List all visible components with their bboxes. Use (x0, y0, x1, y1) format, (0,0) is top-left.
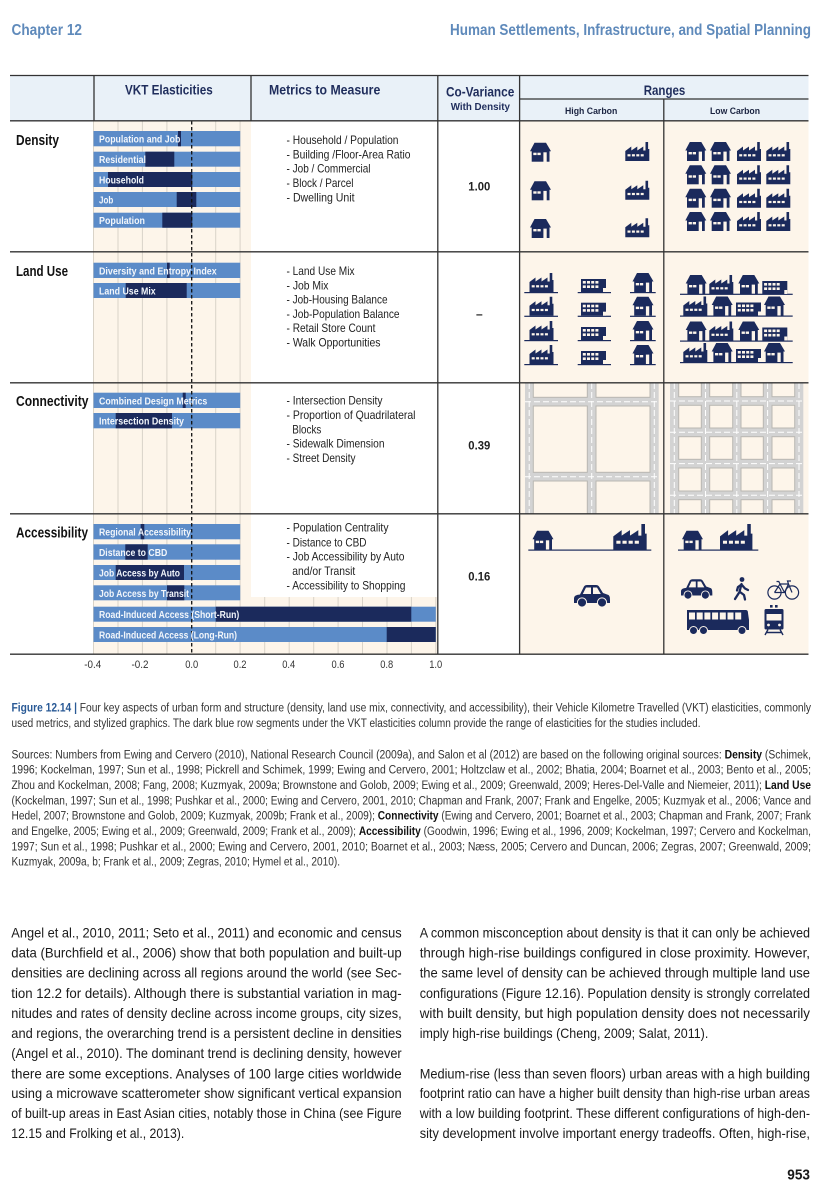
icons: accessibility low carbon (678, 524, 799, 635)
metrics: land use: - Land Use Mix (286, 264, 354, 278)
icon: tram (764, 605, 784, 635)
axis labels: 0.4 (282, 659, 295, 671)
metrics: land use: - Walk Opportunities (286, 336, 380, 350)
co-variance values: 0.16 (468, 570, 491, 584)
metrics: connectivity: - Proportion of Quadrilateral (286, 408, 416, 422)
bar labels: Population (99, 215, 145, 227)
figure caption (12, 703, 811, 730)
icons: accessibility high carbon (528, 524, 651, 607)
metrics: accessibility: - Job Accessibility by Auto (286, 549, 405, 563)
bar labels: Diversity and Entropy Index (99, 265, 217, 277)
metrics: connectivity: - Street Density (286, 451, 356, 465)
icons: density high carbon (530, 142, 649, 238)
bar chart: VKT elasticities (84, 121, 442, 671)
axis labels: 0.6 (332, 659, 344, 671)
sources note: Sources: Numbers from Ewing and Cervero (2010), National Research Council (2009a), and Salon et al (2012) are based on the following original sources: Density (Schimek, (12, 749, 811, 761)
metrics: density: - Block / Parcel (286, 176, 354, 190)
bar labels: Regional Accessibility (99, 527, 191, 539)
metrics: connectivity (286, 394, 416, 465)
icon: bus (687, 610, 749, 634)
body text: left column: and regions, the overarching trend is a persistent decline in densities (11, 1025, 402, 1041)
body text: left column (11, 925, 402, 1141)
icons: land use low carbon (680, 275, 793, 363)
axis labels (84, 659, 442, 671)
column headings: VKT Elasticities (125, 82, 213, 98)
chapter label: Chapter 12 (12, 22, 82, 39)
bar labels: Job Access by Auto (99, 568, 180, 580)
row headings: Land Use (16, 264, 68, 280)
icon: car (681, 579, 712, 599)
co-variance values (468, 179, 491, 584)
axis labels: 0.8 (380, 659, 393, 671)
street grid: connectivity high carbon (525, 383, 659, 514)
icons: land use high carbon (524, 273, 656, 365)
metrics: accessibility: - Accessibility to Shopping (286, 578, 406, 592)
body text: left column: there are some exceptions. Analyses of 100 large cities worldwide (11, 1065, 402, 1081)
figure table (10, 76, 808, 671)
metrics: land use (286, 264, 400, 350)
axis labels: -0.4 (84, 659, 101, 671)
metrics: land use: - Job-Housing Balance (286, 292, 388, 306)
icon: bicycle (768, 581, 799, 599)
body text: left column: tion 12.2 for details). Although there is substantial variation in mag- (11, 985, 402, 1001)
bar labels: Road-Induced Access (Long-Run) (99, 630, 237, 642)
icon: pedestrian (735, 577, 748, 600)
bar labels: Job (99, 194, 113, 206)
metrics: accessibility: - Population Centrality (286, 521, 388, 535)
body text: right column: through high-rise buildings configured in close proximity. However, (420, 945, 810, 961)
column headings: Low Carbon (710, 106, 760, 117)
metrics: density: - Building /Floor-Area Ratio (286, 148, 411, 162)
column headings (125, 82, 760, 117)
column headings: Metrics to Measure (269, 82, 380, 98)
metrics: accessibility: - Distance to CBD (286, 535, 367, 549)
body text: left column: (Angel et al., 2010). The dominant trend is declining density, however (11, 1045, 402, 1061)
bars: connectivity (94, 393, 240, 428)
metrics: accessibility (286, 521, 406, 592)
metrics: density: - Job / Commercial (286, 162, 370, 176)
metrics: land use: - Job-Population Balance (286, 307, 400, 321)
table header background (10, 76, 808, 121)
bar labels: Residential (99, 154, 146, 166)
bar labels (99, 134, 239, 641)
bar labels: Population and Job (99, 134, 180, 146)
column headings: Co-Variance (446, 84, 514, 100)
bar labels: Household (99, 174, 144, 186)
metrics: land use: - Job Mix (286, 278, 328, 292)
body text: left column: data (Burchfield et al., 2006) show that both population and built-up (11, 945, 402, 961)
column headings: With Density (451, 101, 510, 113)
metrics: density (286, 133, 411, 204)
metrics: density: - Household / Population (286, 133, 398, 147)
metrics: accessibility: and/or Transit (292, 564, 356, 578)
metrics: land use: - Retail Store Count (286, 321, 376, 335)
zero line (191, 121, 193, 654)
table rules (10, 76, 808, 654)
bar labels: Combined Design Metrics (99, 395, 207, 407)
row headings: Density (16, 133, 59, 149)
page header (12, 22, 811, 39)
figure caption: used metrics, and stylized graphics. The dark blue row segments under the VKT elasticities column provide the range of elasticities for the studies included. (12, 718, 700, 730)
body text: left column: densities are declining across all regions around the world (see Sec- (11, 965, 402, 981)
metrics: connectivity: - Sidewalk Dimension (286, 437, 384, 451)
body text: left column: Angel et al., 2010, 2011; Seto et al., 2011) and economic and census (11, 925, 402, 941)
column headings: High Carbon (565, 106, 617, 117)
bars: land use (94, 263, 240, 298)
metrics: connectivity: - Intersection Density (286, 394, 382, 408)
sources note (12, 749, 811, 869)
body text: left column: nitudes and rates of density decline across income groups, city sizes, (11, 1005, 402, 1021)
row headings: Accessibility (16, 526, 88, 542)
bars: density (94, 131, 240, 228)
co-variance values: – (476, 307, 483, 321)
axis labels: -0.2 (132, 659, 148, 671)
co-variance values: 0.39 (468, 439, 491, 453)
row headings: Connectivity (16, 394, 88, 410)
column headings: Ranges (644, 82, 685, 98)
co-variance values: 1.00 (468, 179, 491, 193)
street grid: connectivity low carbon (670, 383, 803, 514)
row headings (16, 133, 88, 542)
cream panel: high and low carbon ranges (520, 121, 808, 654)
icons: density low carbon (685, 142, 790, 231)
bars: accessibility (94, 524, 436, 642)
body text: left column: using a microwave scatterometer show significant vertical expansion (11, 1085, 402, 1101)
metrics: connectivity: Blocks (292, 422, 321, 436)
body text: right column: imply high-rise buildings (Cheng, 2009; Salat, 2011). (420, 1025, 708, 1041)
axis labels: 0.2 (234, 659, 246, 671)
bar labels: Job Access by Transit (99, 588, 189, 600)
bar labels: Intersection Density (99, 416, 184, 428)
axis labels: 0.0 (185, 659, 198, 671)
body text: left column: of built-up areas in East Asian cities, notably those in China (see Figure (11, 1105, 402, 1121)
body text: right column: with built density, but high population density does not necessarily (419, 1005, 810, 1021)
bar labels: Distance to CBD (99, 547, 168, 559)
sources note: Kuzmyak, 2009a, b; Frank et al., 2009; Zegras, 2010; Hymel et al., 2010). (12, 857, 340, 869)
bar labels: Road-Induced Access (Short-Run) (99, 609, 239, 621)
bar labels: Land Use Mix (99, 286, 156, 298)
body text: right column (419, 925, 810, 1141)
axis labels: 1.0 (429, 659, 442, 671)
page number: 953 (787, 1166, 810, 1183)
body text: left column: 12.15 and Frolking et al., 2013). (11, 1125, 184, 1141)
metrics: density: - Dwelling Unit (286, 190, 355, 204)
